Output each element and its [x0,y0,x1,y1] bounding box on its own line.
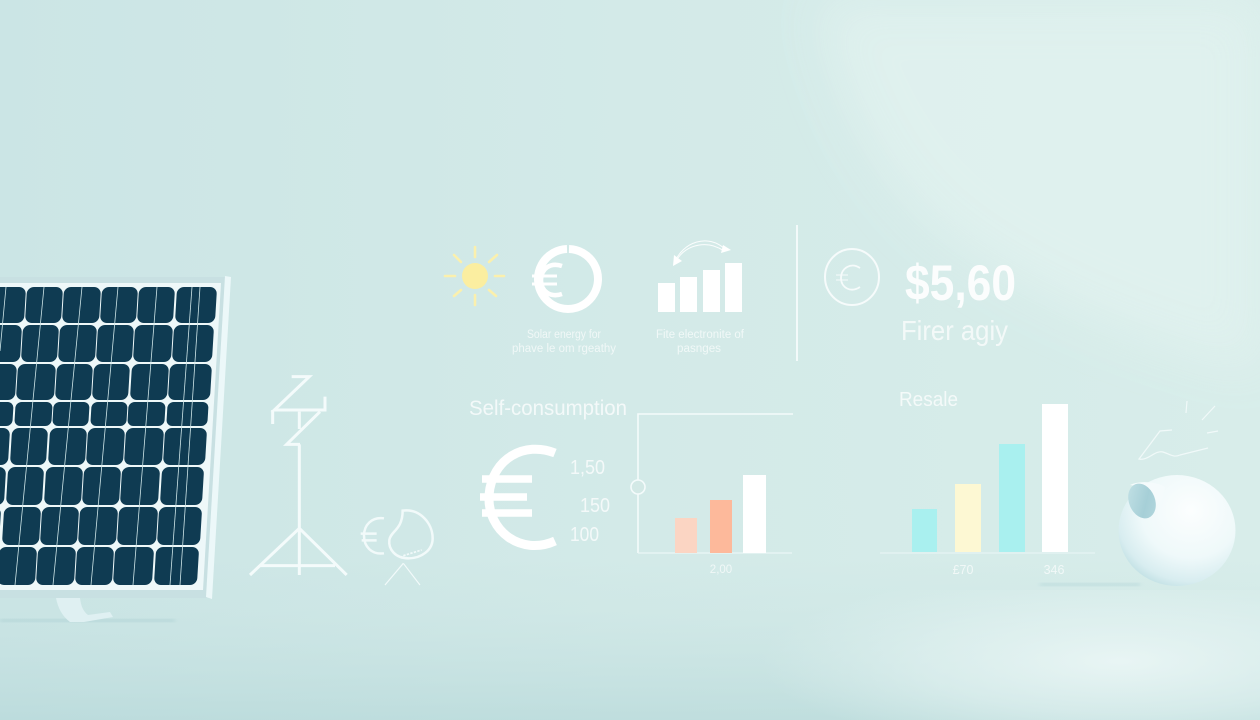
bar chart: resale: £70 [953,563,973,577]
icon: large euro [480,449,555,546]
panel frame [0,276,231,599]
stat label: Firer agiy [901,315,1008,346]
stat value: $5,60 [905,255,1016,311]
axis values: 100 [570,524,599,546]
icon: sun [445,247,504,305]
icon: euro ring [532,249,598,309]
text: electronics caption: pasnges [677,343,721,355]
solar panel [0,276,231,622]
text: solar energy caption: Solar energy for [527,329,601,341]
text: solar energy caption: phave le om rgeathy [512,343,616,355]
text: electronics caption [656,329,745,355]
heading: self-consumption: Self-consumption [469,397,627,420]
bar chart: self-consumption: 2,00 [710,564,732,576]
axis values [570,457,610,546]
bar chart: self-consumption [631,414,793,576]
bar chart: resale: 346 [1044,563,1064,577]
cell grid wires [0,287,200,585]
axis values: 150 [580,495,610,517]
panel stand [56,598,113,622]
axis values: 1,50 [570,457,605,479]
icon: sparkline and rays [1139,401,1218,459]
icon: euro coin [825,249,879,305]
icon: bars with curved arrows [658,241,742,312]
text: solar energy caption [512,329,616,355]
divider line [796,225,798,361]
solar cells [0,287,217,585]
heading: resale: Resale [899,389,958,411]
icon: mounting tripod [250,377,347,575]
text: electronics caption: Fite electronite of [656,329,745,341]
bar chart: resale [880,404,1095,577]
icon: euro and piggy outline [361,510,433,585]
sphere device [1040,475,1236,586]
